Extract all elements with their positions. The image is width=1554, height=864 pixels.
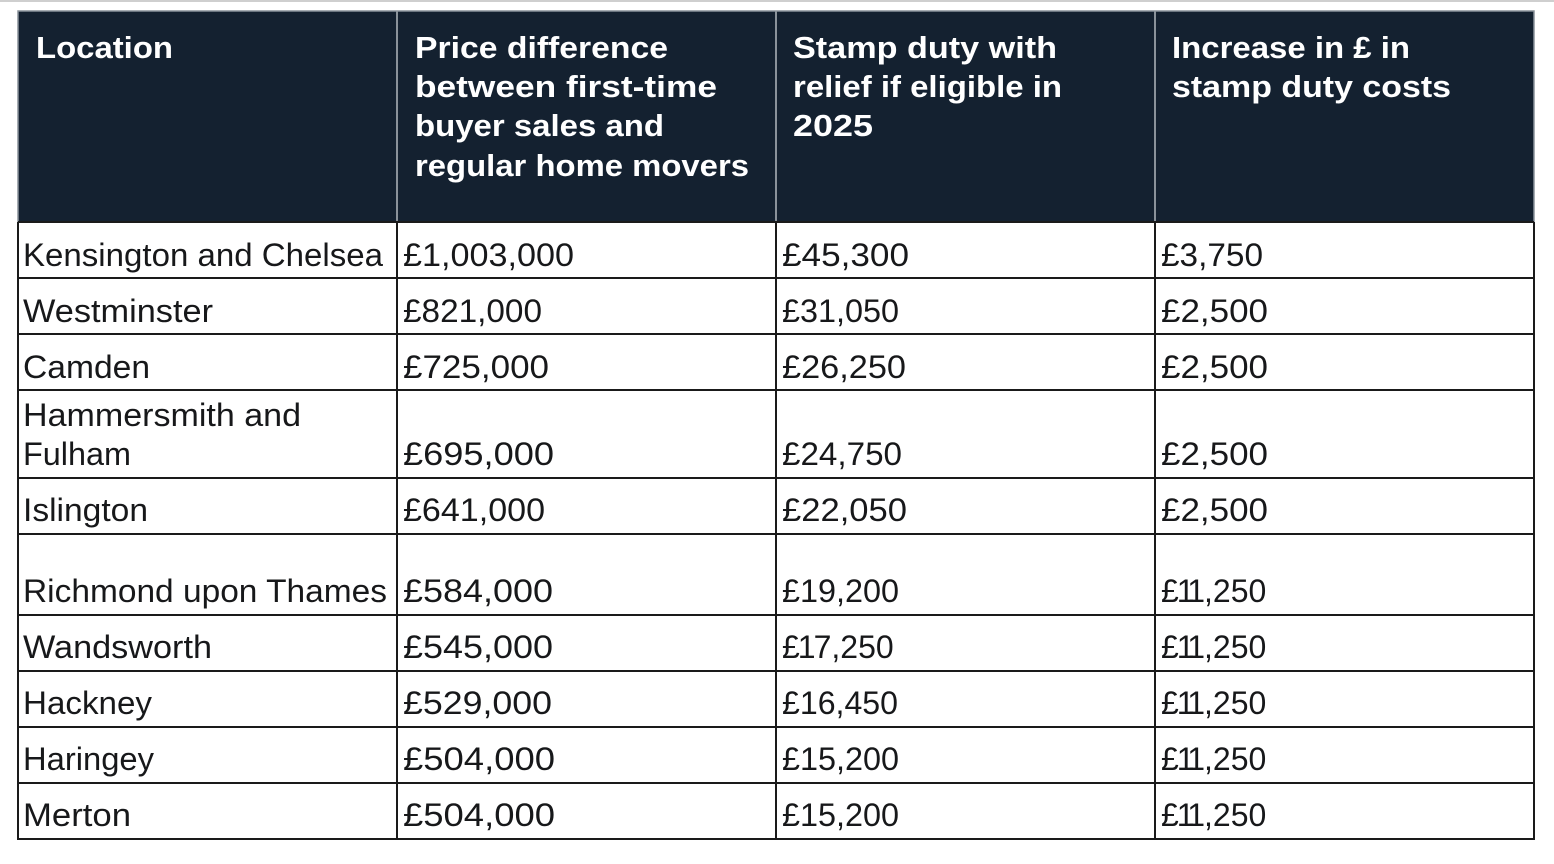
row: Camden: Camden [23,349,150,385]
header: stamp duty: relief if eligible in [793,69,1062,104]
header: price difference [415,30,749,183]
row: Westminster: £31,050 [782,293,899,329]
row: Kensington and Chelsea: £3,750 [1161,237,1263,273]
row: Hackney: Hackney [23,685,152,721]
row: Merton: £504,000 [403,797,555,833]
row: Hammersmith and Fulham: £24,750 [782,436,902,472]
row: Wandsworth: Wandsworth [23,629,212,665]
row: Camden [23,349,1268,385]
row: Westminster: £2,500 [1161,293,1268,329]
row: Kensington and Chelsea: £45,300 [782,237,909,273]
row: Merton: Merton [23,797,131,833]
row: Hammersmith and Fulham: Hammersmith and [23,397,301,433]
row: Islington: £2,500 [1161,492,1268,528]
header: increase: stamp duty costs [1172,69,1451,104]
row: Camden: £2,500 [1161,349,1268,385]
header: price difference: between first-time [415,69,717,104]
header: price difference: buyer sales and [415,108,664,143]
row: Wandsworth: £11,250 [1161,629,1266,665]
row: Merton: £15,200 [782,797,899,833]
row: Merton: £11,250 [1161,797,1266,833]
row: Kensington and Chelsea: Kensington and Chelsea [23,237,383,273]
row: Hammersmith and Fulham: £695,000 [403,436,554,472]
row: Haringey: Haringey [23,741,154,777]
row: Hammersmith and Fulham: £2,500 [1161,436,1268,472]
row: Haringey [23,741,1266,777]
row: Richmond upon Thames [23,573,1266,609]
table grid [18,222,1534,840]
row: Westminster [23,293,1268,329]
row: Haringey: £11,250 [1161,741,1266,777]
row: Merton [23,797,1266,833]
header: increase: Increase in £ in [1172,30,1410,65]
row: Islington: £22,050 [782,492,907,528]
header: stamp duty: 2025 [793,108,873,143]
header: increase [1172,30,1451,104]
row: Richmond upon Thames: Richmond upon Thames [23,573,387,609]
row: Hackney: £11,250 [1161,685,1266,721]
table header [18,11,1534,222]
row: Kensington and Chelsea: £1,003,000 [403,237,574,273]
header: location: Location [36,30,173,65]
row: Camden: £725,000 [403,349,549,385]
row: Hackney [23,685,1266,721]
row: Haringey: £15,200 [782,741,899,777]
header: stamp duty [793,30,1062,143]
row: Richmond upon Thames: £19,200 [782,573,899,609]
row: Islington: £641,000 [403,492,545,528]
row: Wandsworth [23,629,1266,665]
header: stamp duty: Stamp duty with [793,30,1057,65]
row: Haringey: £504,000 [403,741,555,777]
row: Richmond upon Thames: £584,000 [403,573,553,609]
row: Richmond upon Thames: £11,250 [1161,573,1266,609]
row: Islington: Islington [23,492,148,528]
row: Hammersmith and Fulham [23,397,1268,472]
row: Westminster: £821,000 [403,293,542,329]
row: Kensington and Chelsea [23,237,1263,273]
header: price difference: Price difference [415,30,668,65]
row: Hackney: £16,450 [782,685,898,721]
header: price difference: regular home movers [415,148,749,183]
row: Westminster: Westminster [23,293,213,329]
row: Wandsworth: £545,000 [403,629,553,665]
row: Islington [23,492,1268,528]
row: Wandsworth: £17,250 [782,629,894,665]
row: Hammersmith and Fulham: Fulham [23,436,131,472]
row: Hackney: £529,000 [403,685,552,721]
row: Camden: £26,250 [782,349,906,385]
